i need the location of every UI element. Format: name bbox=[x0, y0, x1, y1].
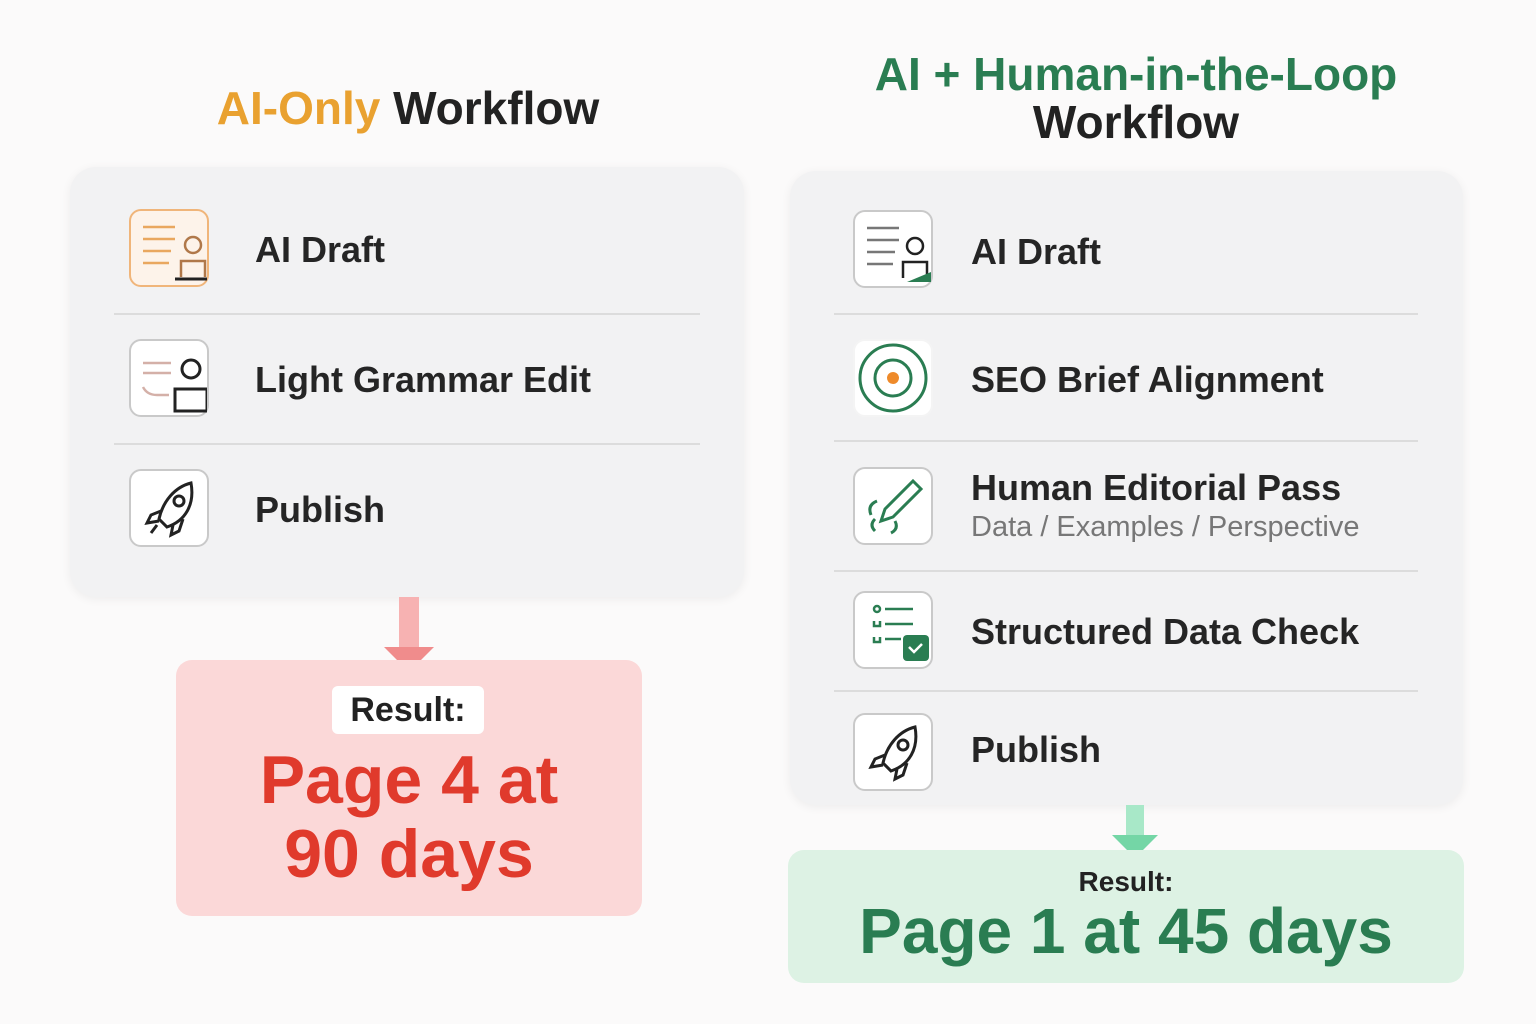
label: Structured Data Check: Structured Data Check bbox=[971, 611, 1359, 652]
panel: AI-only steps bbox=[70, 167, 744, 597]
arrow: right down bbox=[1112, 805, 1158, 850]
icon: AI draft (orange) bbox=[129, 209, 209, 287]
result value: 90 days bbox=[284, 816, 534, 892]
result value: Page 4 at bbox=[260, 742, 558, 818]
label: AI Draft: AI Draft bbox=[971, 231, 1101, 272]
sublabel: Data / Examples / Perspective bbox=[971, 511, 1359, 543]
result value: Page 1 at 45 days bbox=[859, 895, 1393, 967]
title: AI + Human-in-the-Loop Workflow: AI + Human-in-the-Loop bbox=[875, 48, 1397, 100]
label: Human Editorial Pass: Human Editorial Pass bbox=[971, 467, 1341, 508]
title: AI-Only Workflow: AI-Only Workflow bbox=[217, 82, 599, 134]
icon: AI draft bbox=[853, 210, 933, 288]
title: AI + Human-in-the-Loop Workflow: Workflow bbox=[1033, 96, 1239, 148]
label: SEO Brief Alignment: SEO Brief Alignment bbox=[971, 359, 1324, 400]
result label bbox=[332, 686, 484, 734]
result label: Result: bbox=[1079, 866, 1173, 897]
panel: human-in-the-loop steps bbox=[790, 171, 1463, 805]
label: Light Grammar Edit: Light Grammar Edit bbox=[255, 359, 591, 400]
result: human-in-the-loop bbox=[788, 850, 1464, 983]
label: Publish: Publish bbox=[255, 489, 385, 530]
result value bbox=[260, 742, 558, 892]
result label: Result: bbox=[350, 691, 466, 729]
icon: checklist bbox=[853, 591, 933, 669]
label: Publish: Publish bbox=[971, 729, 1101, 770]
arrow: left down bbox=[384, 597, 434, 660]
icon: rocket bbox=[129, 469, 209, 547]
result: AI-only bbox=[176, 660, 642, 916]
icon: grammar edit bbox=[129, 339, 209, 417]
label: AI Draft: AI Draft bbox=[255, 229, 385, 270]
title: AI + Human-in-the-Loop Workflow bbox=[875, 48, 1397, 148]
icon: pencil bbox=[853, 467, 933, 545]
icon: target bbox=[853, 339, 933, 417]
icon: rocket bbox=[853, 713, 933, 791]
